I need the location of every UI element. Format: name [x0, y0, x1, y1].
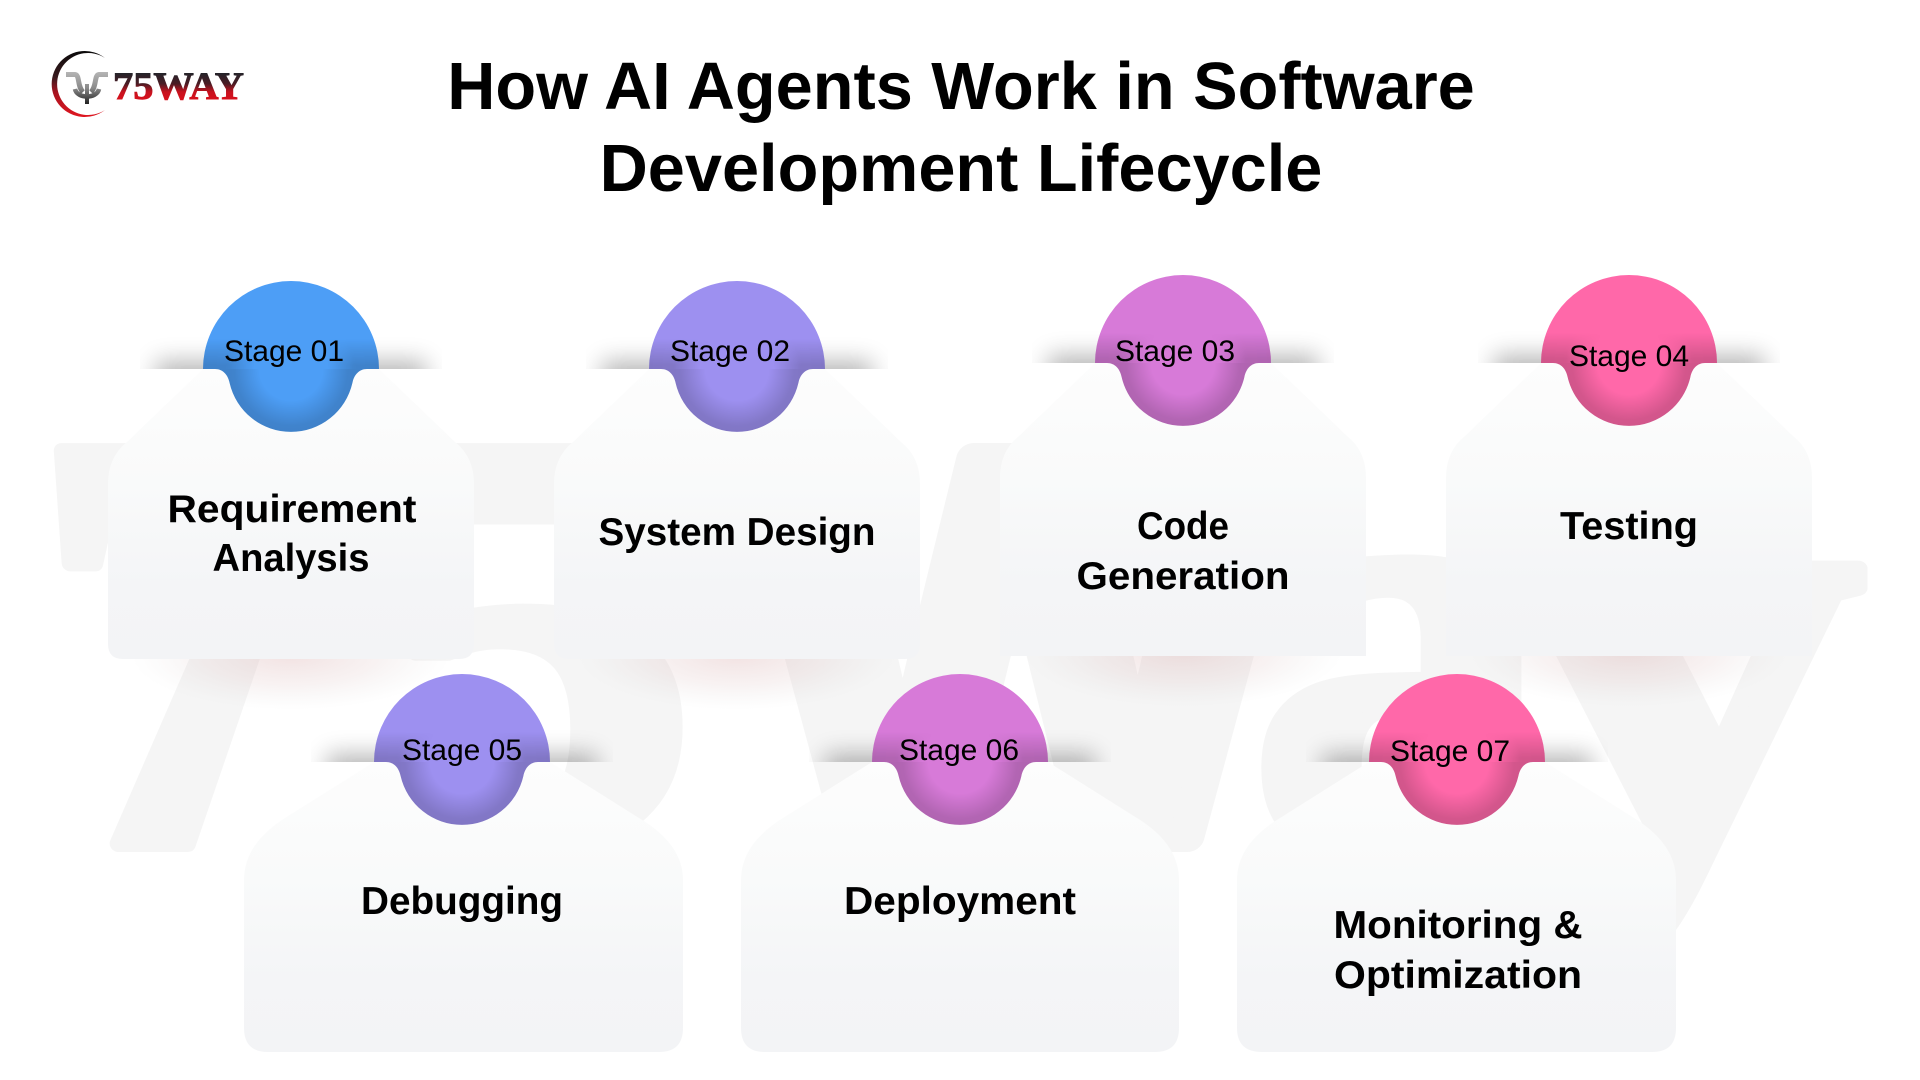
- background watermark: 75Way: [18, 309, 1865, 975]
- card shadow: [577, 655, 897, 765]
- card shadow: [1469, 652, 1789, 762]
- neck shadow: [814, 740, 1106, 762]
- background watermark: 75Way: y: [1505, 310, 1865, 975]
- stage label: Stage 05: [402, 734, 522, 767]
- logo wordmark: 75WAY: [113, 65, 244, 108]
- card body: [108, 369, 474, 659]
- card label: Deployment: [844, 880, 1076, 923]
- stage label: Stage 04: [1569, 340, 1689, 373]
- card label: [1076, 505, 1290, 598]
- badge circle: [203, 281, 379, 457]
- panel: stage 05 debugging: [244, 674, 683, 1052]
- card label: Generation: [1076, 555, 1290, 598]
- stage label: Stage 03: [1115, 335, 1235, 368]
- neck shadow: [1311, 740, 1603, 762]
- badge circle: [1095, 275, 1271, 451]
- background watermark: 75Way: a: [1250, 309, 1550, 974]
- panel: stage 03 code generation: [1000, 275, 1366, 762]
- card label: System Design: [598, 511, 876, 554]
- card label: Monitoring &: [1334, 904, 1582, 947]
- card shadow: [1023, 652, 1343, 762]
- background watermark: 75Way: 7: [18, 310, 364, 974]
- badge circle: [649, 281, 825, 457]
- title: Development Lifecycle: [600, 132, 1322, 206]
- neck shadow: [591, 348, 883, 369]
- neck shadow: [1037, 342, 1329, 363]
- card label: Optimization: [1334, 954, 1582, 997]
- logo: 75WAY: [52, 51, 244, 117]
- icon: trident: [66, 74, 108, 104]
- panel: stage 02 system design: [554, 281, 920, 765]
- panel: stage 07 monitoring and optimization: [1237, 674, 1676, 1052]
- title: [447, 50, 1475, 206]
- panel: stage 04 testing: [1446, 275, 1812, 762]
- panel: stage 06 deployment: [741, 674, 1179, 1052]
- icon: crescent ring: [52, 51, 105, 117]
- panel: stage 01 requirement analysis: [108, 281, 474, 765]
- card body: [1446, 363, 1812, 656]
- stage label: Stage 06: [899, 734, 1019, 767]
- badge circle: [1369, 674, 1545, 850]
- card body: [741, 762, 1179, 1052]
- badge circle: [1541, 275, 1717, 451]
- stage label: Stage 02: [670, 335, 790, 368]
- card label: Debugging: [361, 880, 563, 923]
- card body: [554, 369, 920, 659]
- card body: [1000, 363, 1366, 656]
- stage label: Stage 01: [224, 335, 344, 368]
- card label: Code: [1137, 505, 1229, 548]
- card shadow: [131, 655, 451, 765]
- stage label: Stage 07: [1390, 735, 1510, 768]
- card label: [168, 488, 417, 580]
- badge circle: [872, 674, 1048, 850]
- card body: [1237, 762, 1676, 1052]
- background watermark: 75Way: W: [749, 342, 1294, 951]
- neck shadow: [1483, 342, 1775, 363]
- neck shadow: [145, 348, 437, 369]
- card body: [244, 762, 683, 1052]
- neck shadow: [316, 740, 608, 762]
- card label: [1334, 904, 1582, 997]
- card label: Analysis: [212, 537, 370, 580]
- card label: Testing: [1560, 505, 1698, 548]
- badge circle: [374, 674, 550, 850]
- card label: Requirement: [168, 488, 417, 531]
- background watermark: 75Way: 5: [368, 310, 698, 974]
- title: How AI Agents Work in Software: [447, 50, 1475, 124]
